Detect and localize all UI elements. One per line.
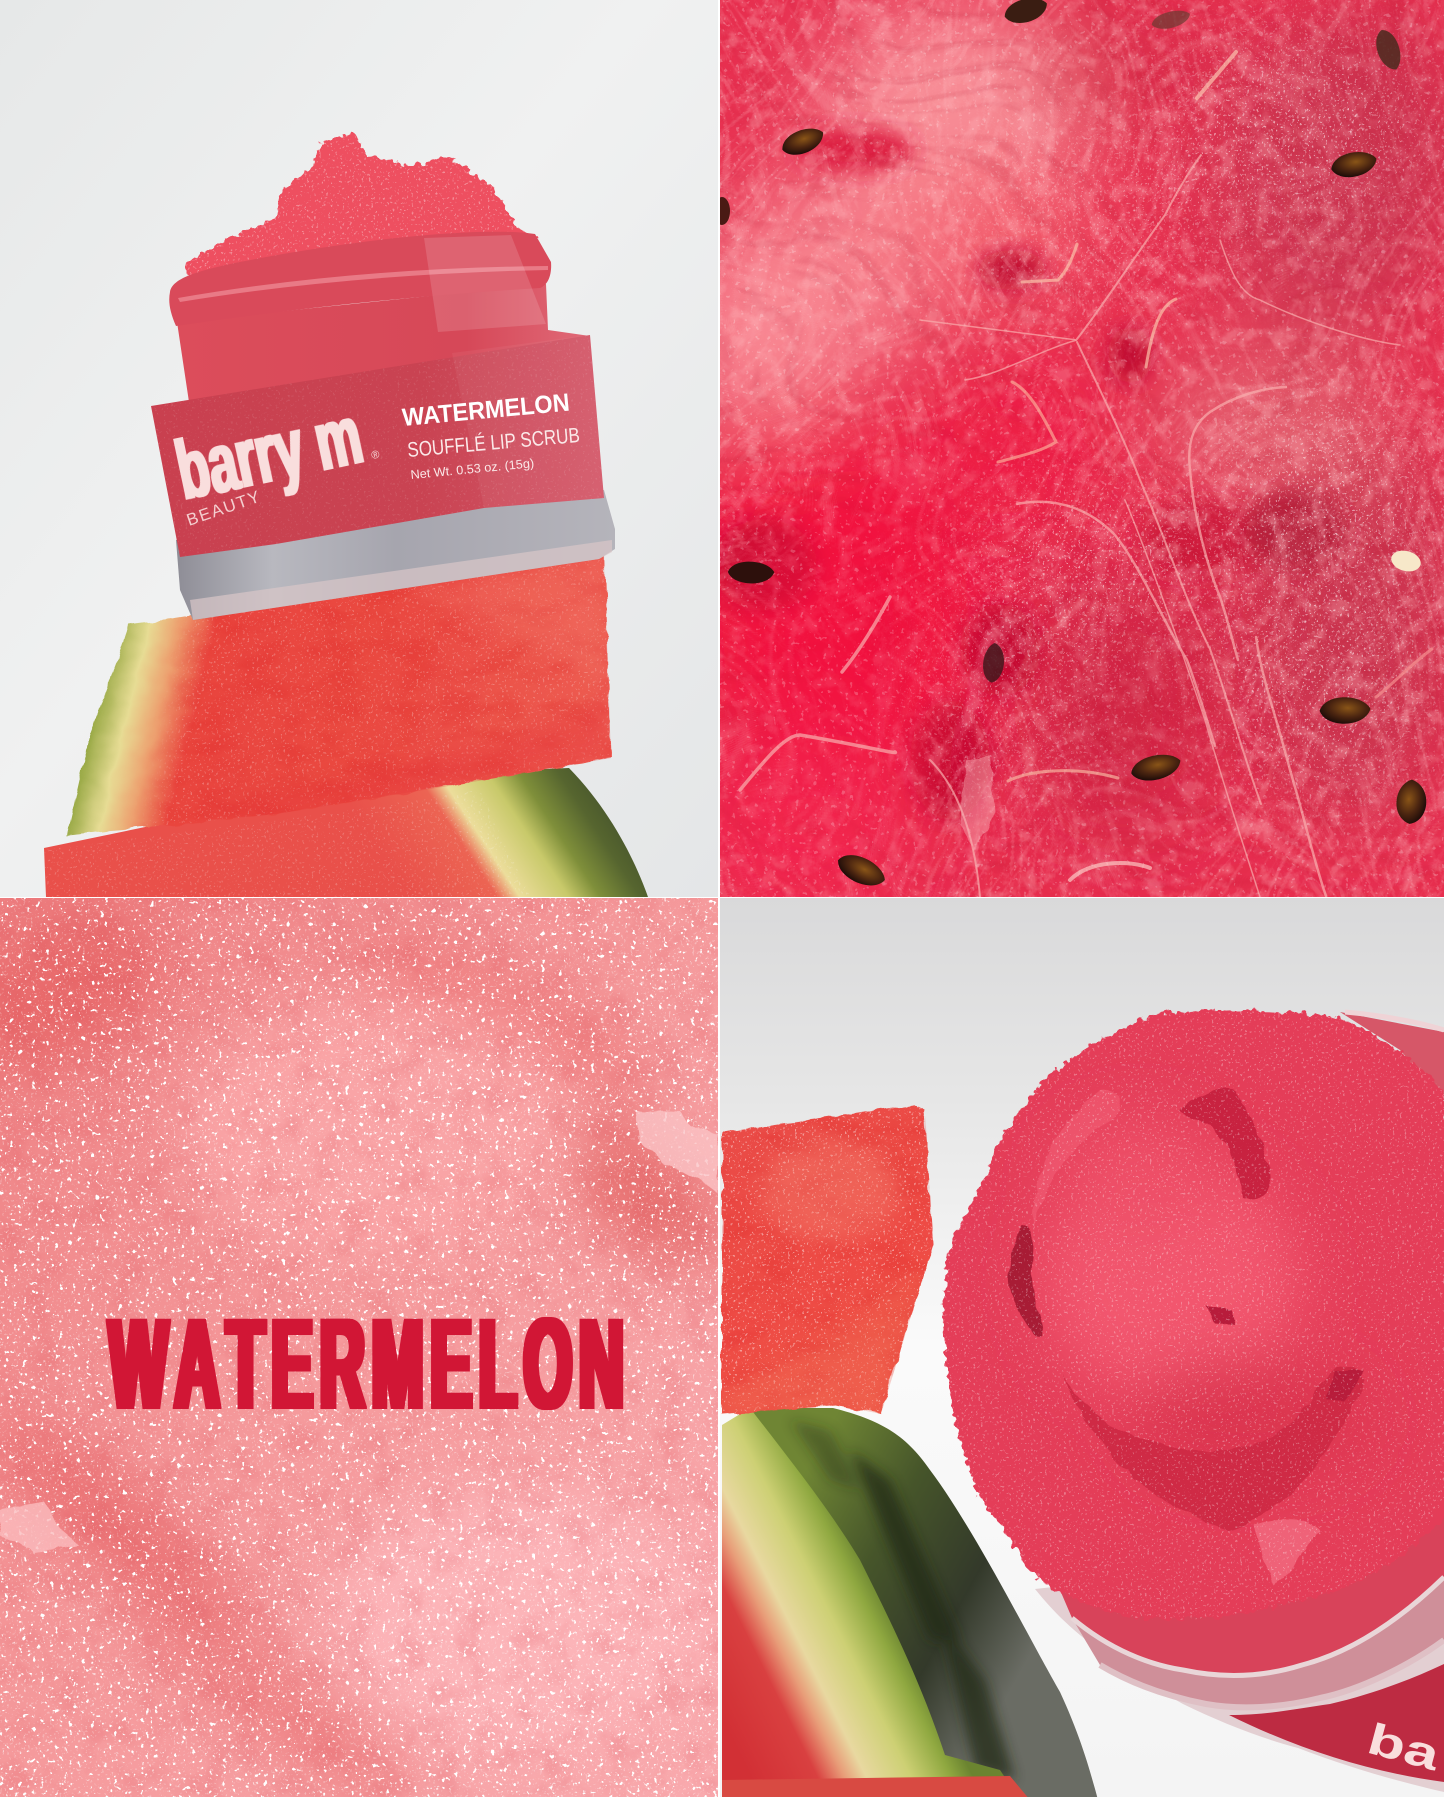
label shimmer: [150, 330, 610, 560]
mottled flesh cells: [720, 0, 1444, 897]
pale sparkle texture: [720, 0, 1444, 897]
logo: beauty: BEAUTY: [184, 487, 262, 530]
colour mottling: [0, 898, 718, 1797]
seed: [1372, 27, 1404, 73]
glass ring band: [1072, 1577, 1444, 1707]
seed: [1393, 778, 1430, 826]
watermelon rind and flesh: [722, 1408, 1020, 1800]
scrub crevice left: [1009, 1225, 1044, 1337]
panel: product jar on watermelon: [0, 0, 718, 900]
sugar lump upper right: [636, 1110, 718, 1192]
pale flesh patch: [960, 756, 995, 850]
jar glass body: [1035, 1480, 1444, 1792]
net weight: Net Wt. 0.53 oz. (15g): [410, 456, 535, 482]
scrub shadow crescent: [1063, 1366, 1365, 1530]
seed: [778, 124, 827, 159]
sugar sparkle: [930, 1000, 1444, 1630]
scrub inner fold: [1033, 1089, 1121, 1230]
watermelon wedge upper: [60, 540, 620, 840]
flesh base: [720, 0, 1444, 897]
flesh strip at bottom: [722, 1776, 1030, 1800]
skin dark stripes: [790, 1420, 1015, 1780]
neck reflection: [424, 235, 546, 332]
darker swirl bands: [0, 874, 756, 1800]
jar label band: [151, 335, 604, 557]
product type: SOUFFLÉ LIP SCRUB: [406, 424, 581, 462]
scrub dent: [1205, 1305, 1235, 1325]
brand logo: [168, 387, 381, 530]
jar inner red ring: [1060, 1480, 1444, 1675]
seed: [1002, 0, 1050, 26]
seed: [1329, 149, 1378, 180]
panel: scrub texture: [0, 874, 756, 1800]
seed: [727, 560, 775, 586]
jar base glass: [176, 490, 615, 620]
logo: barry m: barry m: [168, 387, 370, 518]
registered mark: ®: [370, 449, 381, 462]
swirl light areas: [1040, 1120, 1370, 1480]
panel: scrub close-up with watermelon: [720, 898, 1444, 1800]
jar bottom glass edge: [190, 540, 612, 620]
scrub surface: [930, 1000, 1444, 1630]
studio background: [0, 0, 718, 897]
rim highlight: [178, 266, 548, 302]
sugar crystals large: [0, 898, 718, 1797]
lip scrub mound: [185, 132, 538, 276]
jar glass: [1035, 1012, 1444, 1792]
seed: [833, 848, 890, 894]
fine sparkle: [720, 0, 1444, 897]
scrub notch: [1325, 1370, 1365, 1400]
seed: [1150, 8, 1192, 32]
watermelon wedge lower: [40, 760, 650, 900]
sugar crystals fine: [0, 898, 718, 1797]
saturated red wash: [710, 0, 1440, 900]
ring highlight upper: [1072, 1577, 1444, 1675]
flesh colour areas: [670, 0, 1444, 910]
sugar lump lower left: [0, 1502, 80, 1552]
jar rim: [169, 232, 551, 326]
dark seed pits: [713, 128, 1345, 820]
seed: [1319, 696, 1371, 725]
seed: edge: [714, 197, 730, 225]
scrub disc: [943, 1010, 1444, 1620]
watermelon skin: [740, 1408, 1098, 1800]
jar back rim highlight: [1345, 1012, 1444, 1030]
headline: WATERMELON: [109, 1294, 631, 1436]
logo fragment: ba: [1362, 1714, 1444, 1780]
seed: [1129, 751, 1183, 784]
seeds: [714, 0, 1430, 894]
label reflection: [452, 335, 604, 508]
label text block: [401, 389, 581, 482]
jar back rim: [1340, 1012, 1444, 1100]
seed: [980, 642, 1007, 684]
seed: pale: [1389, 547, 1423, 575]
product flavour: WATERMELON: [401, 389, 571, 432]
scrub lump: [1252, 1520, 1320, 1585]
jar neck: [177, 284, 590, 402]
pink base: [0, 898, 718, 1797]
jar label: [1229, 1664, 1444, 1782]
studio background: [720, 898, 1444, 1797]
scrub crevice top: [1178, 1088, 1270, 1199]
ring highlight lower: [1100, 1640, 1444, 1707]
melon cube: [720, 1100, 940, 1420]
pale fibres: [740, 52, 1432, 897]
